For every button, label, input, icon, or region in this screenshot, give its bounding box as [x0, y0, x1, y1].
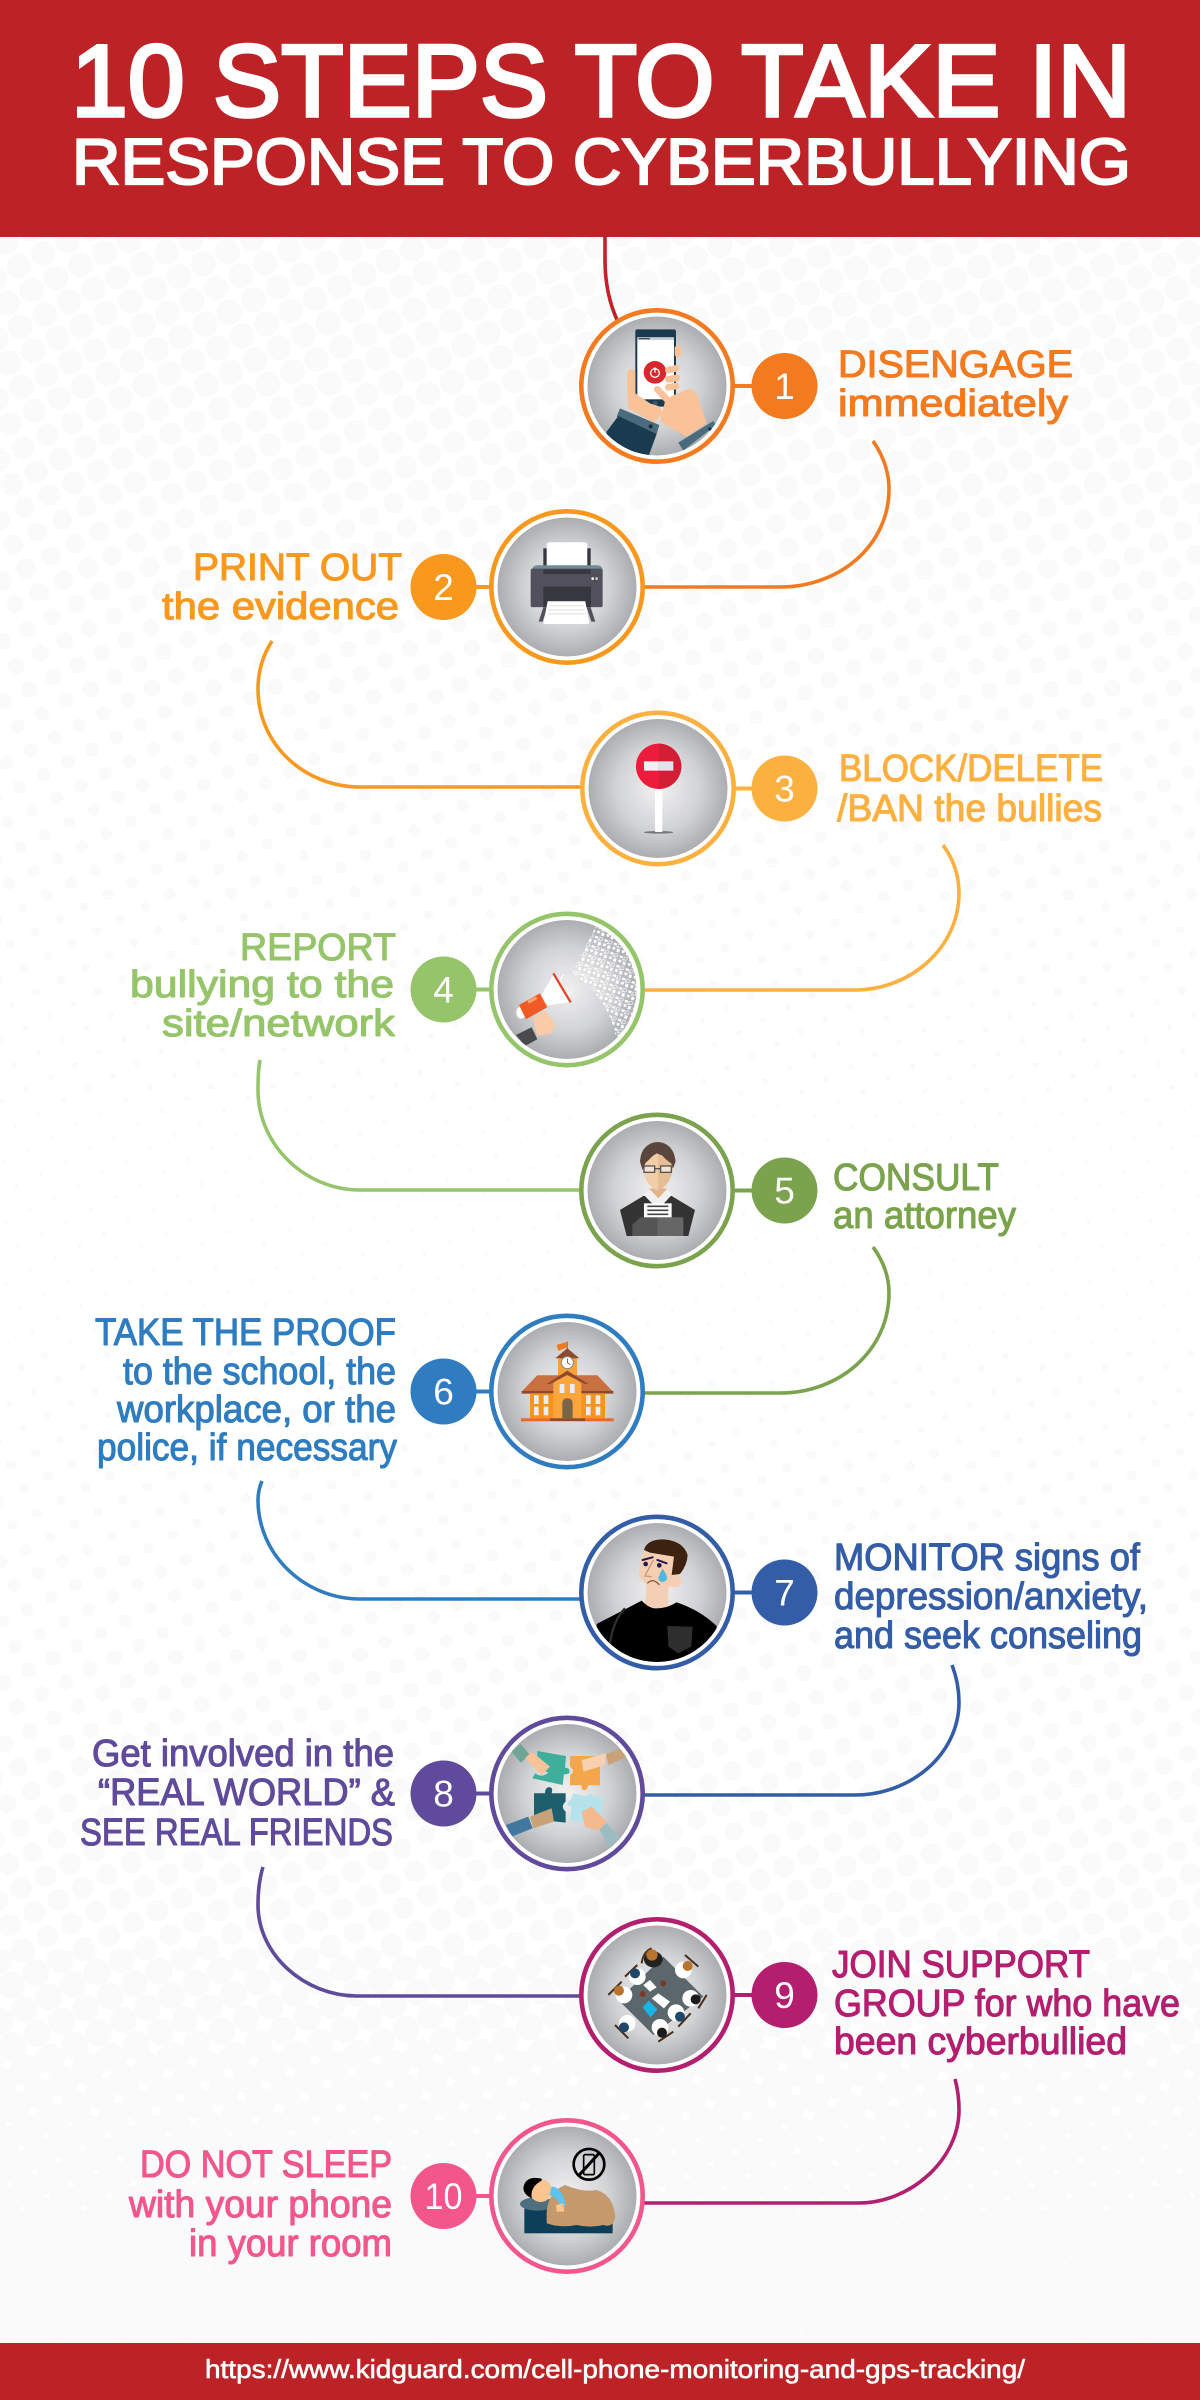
step 9: join support group: [581, 1919, 1180, 2071]
icon: printer: [531, 542, 603, 624]
label 7: and seek conseling: [834, 1615, 1142, 1657]
icon: school building: [521, 1342, 614, 1421]
icon: megaphone with social icons: [516, 925, 642, 1046]
icon: meeting from above: [608, 1948, 707, 2042]
footer banner: [0, 2343, 1200, 2400]
label 8: Get involved in the: [92, 1733, 394, 1775]
number badge 6: [410, 1358, 476, 1424]
number badge 9: 9: [774, 1975, 795, 2016]
label 10: in your room: [189, 2223, 392, 2265]
title line 1: 10 STEPS TO TAKE IN: [71, 24, 1131, 138]
label 6: workplace, or the: [116, 1389, 396, 1431]
label 3: BLOCK/DELETE: [839, 748, 1103, 790]
connector paths between steps: [258, 237, 959, 2203]
label 5: [833, 1157, 1016, 1237]
label 9: JOIN SUPPORT: [832, 1944, 1090, 1986]
label 9: [832, 1944, 1180, 2063]
label 3: /BAN the bullies: [837, 788, 1102, 830]
number badge 3: 3: [774, 768, 795, 810]
step 7: monitor: [581, 1517, 1148, 1668]
label 7: MONITOR signs of: [834, 1537, 1140, 1579]
number badge 6: 6: [433, 1372, 454, 1412]
icon: hands holding phone: [603, 329, 716, 457]
icon: no entry sign: [636, 744, 681, 834]
label 6: TAKE THE PROOF: [95, 1312, 396, 1354]
header banner: [0, 0, 1200, 237]
step 2: print out: [162, 511, 643, 663]
label 4: bullying to the: [130, 964, 394, 1006]
number badge 9: [752, 1962, 818, 2028]
label 6: to the school, the: [123, 1351, 396, 1393]
number badge 2: 2: [433, 567, 454, 608]
label 1: DISENGAGE: [838, 344, 1073, 386]
label 6: [95, 1312, 397, 1469]
label 9: been cyberbullied: [834, 2021, 1127, 2063]
number badge 7: [752, 1560, 818, 1626]
label 4: REPORT: [240, 927, 396, 969]
label 4: site/network: [162, 1003, 396, 1045]
step 3: block / delete / ban: [582, 713, 1103, 864]
icon: hands with puzzle pieces: [506, 1744, 627, 1847]
label 4: [130, 927, 396, 1045]
number badge 3: [752, 756, 818, 822]
label 2: [162, 547, 402, 628]
label 8: “REAL WORLD” &: [98, 1772, 395, 1814]
title line 2: RESPONSE TO CYBERBULLYING: [72, 125, 1131, 198]
label 5: an attorney: [833, 1195, 1016, 1237]
number badge 4: 4: [433, 970, 454, 1010]
footer url: https://www.kidguard.com/cell-phone-monitoring-and-gps-tracking/: [205, 2354, 1026, 2384]
label 6: police, if necessary: [97, 1427, 397, 1469]
number badge 8: [410, 1760, 476, 1826]
number badge 10: 10: [424, 2176, 462, 2217]
number badge 5: [752, 1158, 818, 1224]
label 1: immediately: [838, 383, 1068, 425]
icon: attorney: [620, 1142, 695, 1236]
number badge 4: [410, 956, 476, 1022]
number badge 10: [410, 2163, 476, 2229]
number badge 5: 5: [774, 1170, 795, 1212]
number badge 7: 7: [774, 1572, 795, 1614]
step 5: consult: [581, 1115, 1016, 1266]
label 1: [838, 344, 1073, 425]
label 3: [837, 748, 1103, 830]
label 7: depression/anxiety,: [834, 1576, 1148, 1618]
label 2: PRINT OUT: [193, 547, 402, 589]
step 8: real world: [80, 1718, 643, 1869]
label 10: with your phone: [128, 2184, 392, 2226]
label 8: SEE REAL FRIENDS: [80, 1812, 393, 1854]
label 2: the evidence: [162, 586, 399, 628]
step 6: take the proof: [95, 1312, 643, 1469]
label 5: CONSULT: [833, 1157, 999, 1199]
label 10: [128, 2144, 392, 2265]
number badge 1: 1: [774, 366, 795, 407]
step 10: do not sleep with phone: [128, 2120, 643, 2272]
label 8: [80, 1733, 395, 1854]
label 10: DO NOT SLEEP: [140, 2144, 392, 2186]
icon: person sleeping, no phone: [520, 2149, 615, 2233]
number badge 8: 8: [433, 1774, 454, 1814]
step 4: report: [130, 914, 643, 1065]
icon: crying man: [597, 1539, 717, 1667]
number badge 1: [752, 353, 818, 419]
step 1: disengage: [581, 310, 1073, 462]
label 7: [834, 1537, 1148, 1657]
label 9: GROUP for who have: [834, 1983, 1180, 2025]
number badge 2: [410, 554, 476, 620]
